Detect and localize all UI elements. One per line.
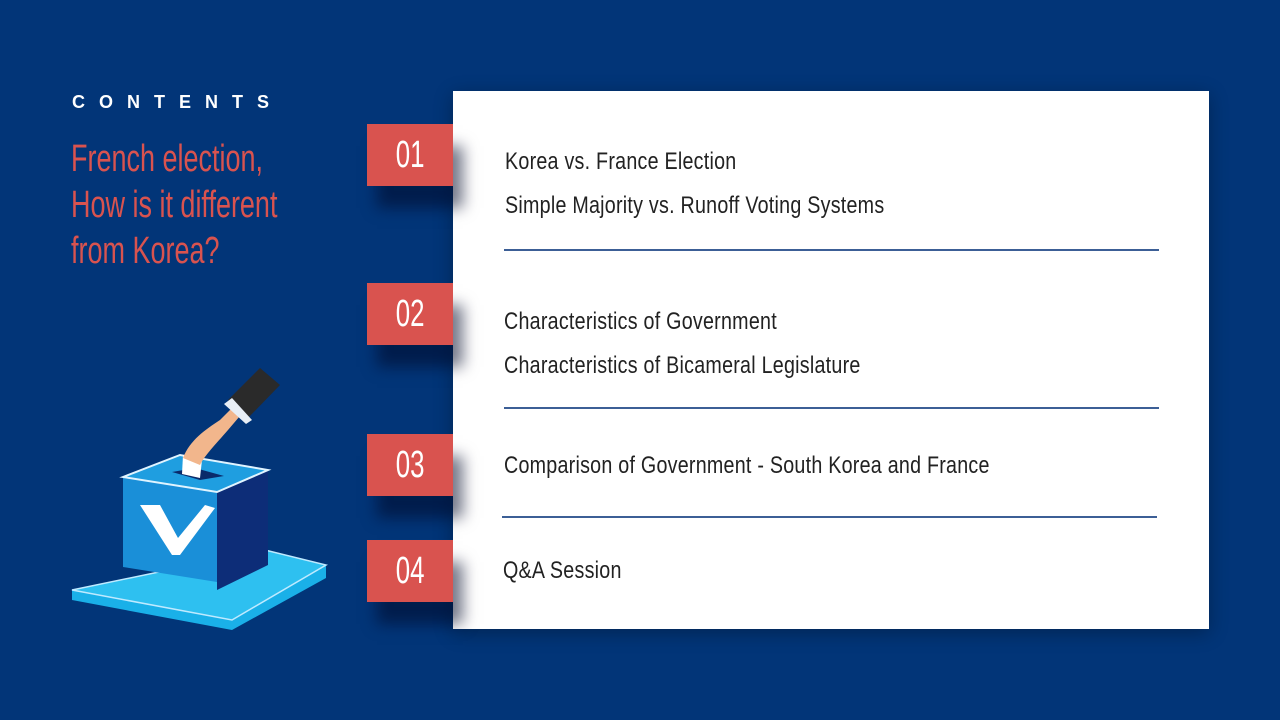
title: from Korea? [71, 230, 219, 272]
tab 01 [367, 124, 453, 186]
tab 04: 04 [396, 550, 424, 592]
item 03 text: Comparison of Government - South Korea and France [504, 452, 990, 479]
item 02 text: Characteristics of Government [504, 308, 777, 335]
contents label: CONTENTS [72, 92, 283, 112]
illustration: ballot box [72, 368, 328, 630]
tab 03 [367, 434, 453, 496]
tab 02 [367, 283, 453, 345]
item 02 text [504, 308, 861, 379]
title: How is it different [71, 184, 277, 226]
item 02 text: Characteristics of Bicameral Legislature [504, 352, 861, 379]
tab 02: 02 [396, 293, 424, 335]
item 04 text: Q&A Session [503, 557, 622, 584]
tab 04 [367, 540, 453, 602]
content card [453, 91, 1209, 629]
item 01 text: Simple Majority vs. Runoff Voting Systems [505, 192, 884, 219]
title [71, 138, 278, 272]
item 01 text [505, 148, 884, 219]
item 01 text: Korea vs. France Election [505, 148, 736, 175]
tab 01: 01 [396, 134, 424, 176]
tab 03: 03 [396, 444, 424, 486]
title: French election, [71, 138, 263, 180]
